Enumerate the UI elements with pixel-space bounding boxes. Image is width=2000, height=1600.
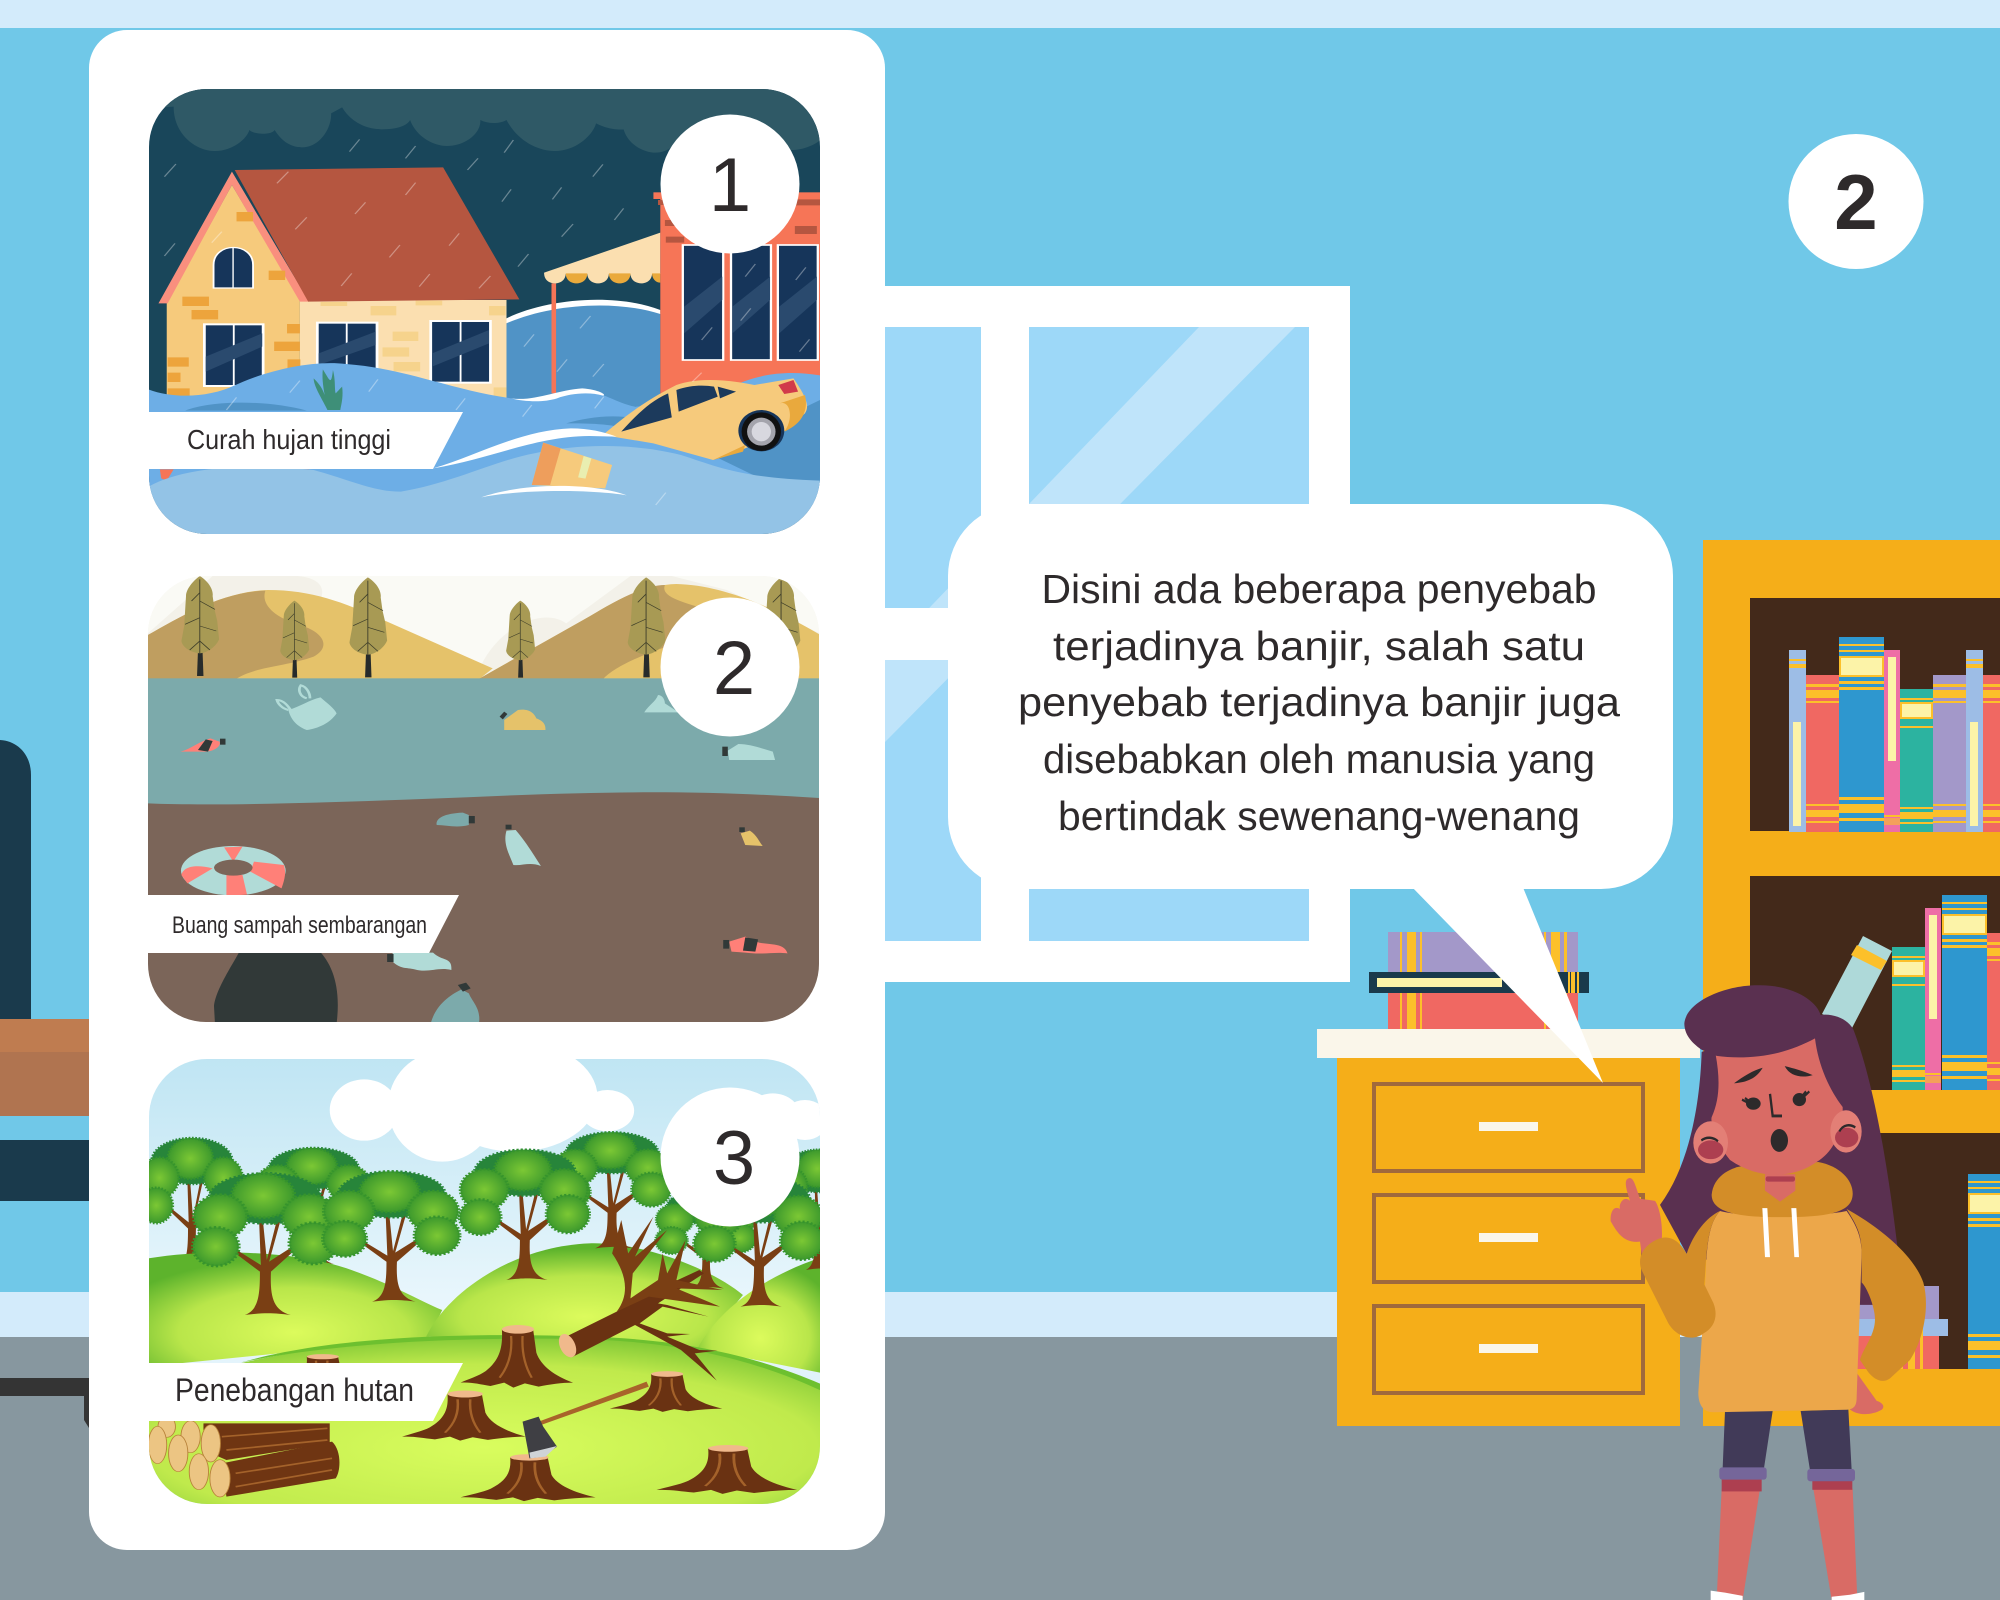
bookcase	[1703, 540, 2000, 1426]
panel 2: littering	[146, 573, 823, 1025]
label ribbon 3	[149, 1363, 463, 1421]
label ribbon 1	[149, 412, 463, 469]
books on cabinet	[1369, 932, 1589, 1033]
label ribbon 2: Buang sampah sembarangan	[172, 912, 427, 939]
character: girl	[1611, 985, 1926, 1600]
speech bubble: penyebab terjadinya banjir juga	[1018, 679, 1620, 725]
number badge 2	[660, 598, 800, 736]
speech bubble: Disini ada beberapa penyebab	[1042, 566, 1596, 612]
number badge 2: 2	[713, 626, 755, 711]
speech bubble: bertindak sewenang-wenang	[1058, 793, 1580, 839]
page number badge	[1788, 134, 1924, 269]
label ribbon 1: Curah hujan tinggi	[187, 424, 391, 455]
number badge 3	[660, 1088, 800, 1226]
baseboard	[0, 1292, 2000, 1337]
panel 3: deforestation	[149, 1059, 820, 1504]
floor	[0, 1337, 2000, 1600]
chair and desk at left	[0, 740, 89, 1428]
main white panel	[89, 30, 885, 1550]
speech bubble: terjadinya banjir, salah satu	[1053, 623, 1585, 669]
window	[880, 286, 1350, 982]
number badge 1	[660, 114, 800, 254]
number badge 3: 3	[713, 1116, 755, 1201]
panel 1: heavy rain	[148, 88, 823, 537]
speech bubble	[948, 504, 1673, 1083]
speech bubble: disebabkan oleh manusia yang	[1043, 736, 1595, 782]
label ribbon 3: Penebangan hutan	[175, 1372, 414, 1408]
page number badge: 2	[1834, 158, 1878, 246]
ceiling band	[0, 0, 2000, 28]
cabinet	[1317, 1029, 1700, 1426]
label ribbon 2	[148, 895, 459, 953]
number badge 1: 1	[709, 143, 751, 228]
